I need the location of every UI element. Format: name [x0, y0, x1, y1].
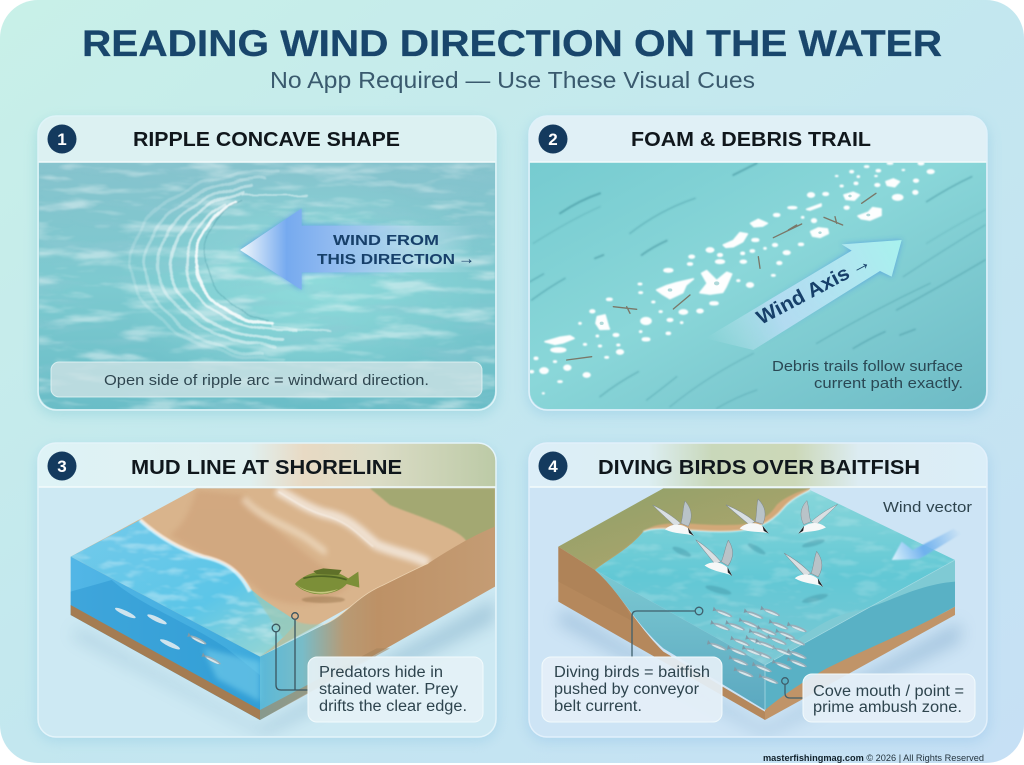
badge 1: 1: [57, 130, 67, 149]
wind vector arrow: [892, 529, 962, 560]
mud line callout: stained water. Prey: [319, 681, 458, 698]
mud line leaders: [272, 613, 309, 690]
tern 2: [726, 499, 769, 536]
bait school: [706, 606, 808, 686]
arrow label: →: [458, 249, 475, 268]
ripple panel wind arrow: [240, 208, 473, 291]
bird shadows: [671, 538, 829, 605]
mud line callout: drifts the clear edge.: [319, 698, 467, 715]
diving birds callout: belt current.: [554, 698, 642, 715]
wind axis label: →: [846, 250, 875, 280]
cove mouth callout: [803, 674, 975, 722]
mud line callout: Predators hide in: [319, 664, 443, 681]
panel: diving birds over baitfish: [527, 443, 989, 742]
ripple caption: Open side of ripple arc = windward direction.: [104, 373, 429, 389]
stained water fringe: [250, 588, 323, 657]
tern 4: [696, 540, 733, 576]
badge 3: [48, 452, 76, 480]
concentric ripple arcs: [130, 170, 330, 360]
heading 1: RIPPLE CONCAVE SHAPE: [133, 128, 400, 151]
arrow label: THIS DIRECTION: [317, 251, 455, 268]
diving birds callout: Diving birds = baitfish: [554, 664, 710, 681]
clear water: [71, 520, 297, 657]
ripple header: [38, 116, 496, 162]
wind axis label: Wind Axis: [753, 262, 853, 329]
ripple caption: [51, 362, 482, 397]
diving birds callout: [542, 657, 722, 722]
ripple water surface: [39, 162, 495, 410]
panel: mud line at shoreline: [36, 443, 498, 742]
tern 5: [784, 551, 824, 587]
right water face: [765, 582, 955, 710]
heading 2: FOAM & DEBRIS TRAIL: [631, 128, 871, 151]
tern 3: [798, 501, 838, 534]
cove mouth callout: prime ambush zone.: [813, 699, 962, 716]
badge 3: 3: [57, 457, 67, 476]
mud line callout: [308, 657, 483, 722]
mud bottom strip: [71, 605, 260, 720]
right cut face: [260, 527, 495, 720]
badge 4: 4: [548, 457, 558, 476]
panel: foam and debris trail: [527, 116, 989, 415]
prey fish: [114, 606, 222, 666]
water top: [595, 490, 955, 665]
surface shimmer: [71, 528, 279, 656]
footer credit: masterfishingmag.com © 2026 | All Rights Reserved: [763, 753, 984, 764]
badge 4: [538, 452, 568, 480]
heading 4: DIVING BIRDS OVER BAITFISH: [598, 456, 920, 479]
cove water shimmer: [595, 490, 955, 665]
debris note: Debris trails follow surface: [772, 359, 963, 375]
debris note: current path exactly.: [814, 376, 963, 392]
debris header: [529, 116, 987, 162]
land top: [558, 488, 810, 570]
diving birds header: [529, 443, 987, 487]
diving birds callout: pushed by conveyor: [554, 681, 699, 698]
debris note: [772, 359, 963, 392]
foam and debris: [530, 162, 934, 394]
tern 1: [653, 501, 694, 536]
badge 1: [48, 124, 76, 154]
diving birds leaders: [632, 607, 804, 698]
arrow label: [317, 235, 472, 264]
cove block diagram: [557, 488, 960, 735]
panel: ripple concave shape: [36, 116, 498, 415]
left water face: [595, 570, 765, 710]
arrow label: WIND FROM: [333, 232, 439, 249]
wind axis arrow: [705, 240, 902, 350]
bass: [295, 568, 359, 603]
sand top: [71, 488, 495, 657]
heading 3: MUD LINE AT SHORELINE: [131, 456, 402, 479]
current streaks: [530, 163, 985, 408]
surf foam: [277, 490, 428, 563]
subtitle: No App Required — Use These Visual Cues: [270, 67, 755, 93]
left wall: [558, 547, 765, 720]
front water face: [71, 557, 260, 720]
badge 2: [538, 124, 568, 154]
mud line header: [38, 443, 496, 487]
title: READING WIND DIRECTION ON THE WATER: [82, 23, 942, 64]
cove mouth callout: Cove mouth / point =: [813, 683, 964, 700]
shoreline block diagram: [71, 488, 495, 735]
sand strip: [765, 607, 955, 720]
badge 2: 2: [548, 130, 558, 149]
wind vector label: Wind vector: [883, 499, 972, 516]
